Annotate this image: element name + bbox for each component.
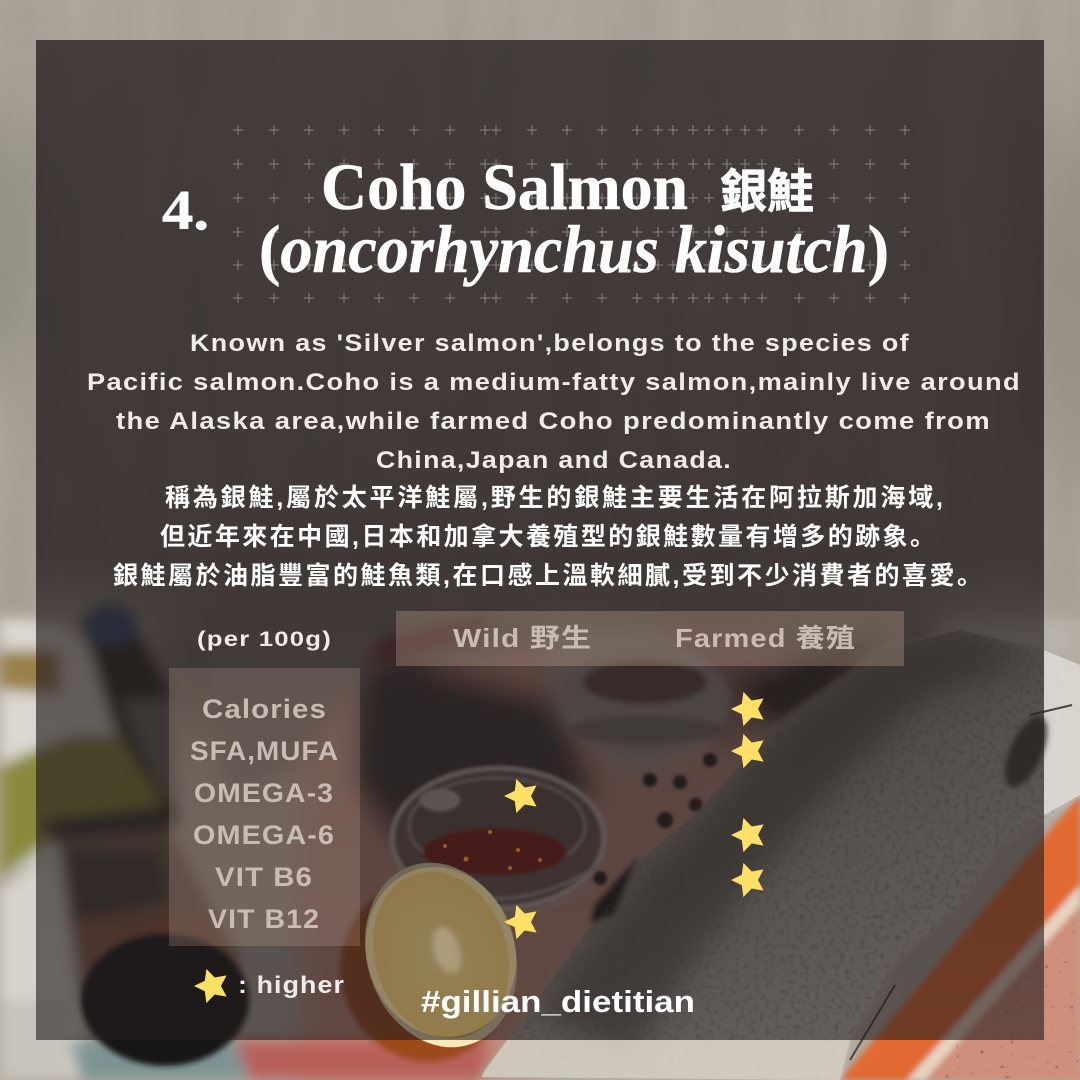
Chinese description xyxy=(113,483,982,590)
lemon xyxy=(317,843,540,1080)
nutrient row labels xyxy=(169,668,360,946)
English description: the Alaska area,while farmed Coho predominantly come from xyxy=(116,408,991,435)
Chinese description: 銀鮭屬於油脂豐富的鮭魚類,在口感上溫軟細膩,受到不少消費者的喜愛。 xyxy=(113,561,982,590)
English description: China,Japan and Canada. xyxy=(376,447,732,474)
dark bottle xyxy=(80,610,180,830)
title: Chinese name: 銀鮭 xyxy=(720,165,814,218)
bottle cap xyxy=(81,934,249,1066)
hashtag: #gillian_dietitian xyxy=(421,984,695,1019)
Chinese description: 但近年來在中國,日本和加拿大養殖型的銀鮭數量有增多的跡象。 xyxy=(160,522,935,551)
English description: Pacific salmon.Coho is a medium-fatty salmon,mainly live around xyxy=(87,369,1021,396)
plus-sign grid decoration xyxy=(233,125,910,303)
title: scientific name: (oncorhynchus kisutch) xyxy=(259,211,889,287)
nutrient row labels: VIT B12 xyxy=(208,904,320,934)
lemon highlight over panel xyxy=(344,847,538,1057)
title block xyxy=(162,151,889,287)
per 100g label: (per 100g) xyxy=(197,628,332,651)
fish xyxy=(470,620,1080,1080)
list number: 4. xyxy=(162,180,209,242)
olive band xyxy=(0,735,165,880)
English description: Known as 'Silver salmon',belongs to the species of xyxy=(190,330,910,357)
nutrient row labels: SFA,MUFA xyxy=(190,736,339,766)
stars: farmed higher xyxy=(731,692,764,897)
table header bar xyxy=(396,611,904,666)
legend: : higher xyxy=(238,972,345,999)
nutrient row labels: OMEGA-3 xyxy=(194,778,334,808)
nutrient row labels: OMEGA-6 xyxy=(193,820,335,850)
spice flecks xyxy=(443,830,542,870)
Chinese description: 稱為銀鮭,屬於太平洋鮭屬,野生的銀鮭主要生活在阿拉斯加海域, xyxy=(165,483,943,512)
stars: wild higher xyxy=(504,779,537,939)
nutrient row labels: VIT B6 xyxy=(215,862,313,892)
glass jar xyxy=(392,753,717,916)
column: wild: Wild 野生 xyxy=(453,623,592,653)
table specks xyxy=(940,916,1080,1078)
left bottle white xyxy=(0,618,170,880)
nutrient row labels: Calories xyxy=(202,694,327,724)
title: Coho Salmon: Coho Salmon xyxy=(321,151,688,224)
column: farmed: Farmed 養殖 xyxy=(675,623,856,653)
peppercorns xyxy=(643,773,657,787)
English description xyxy=(87,330,1021,474)
far jar xyxy=(560,644,730,756)
legend xyxy=(194,969,345,1003)
